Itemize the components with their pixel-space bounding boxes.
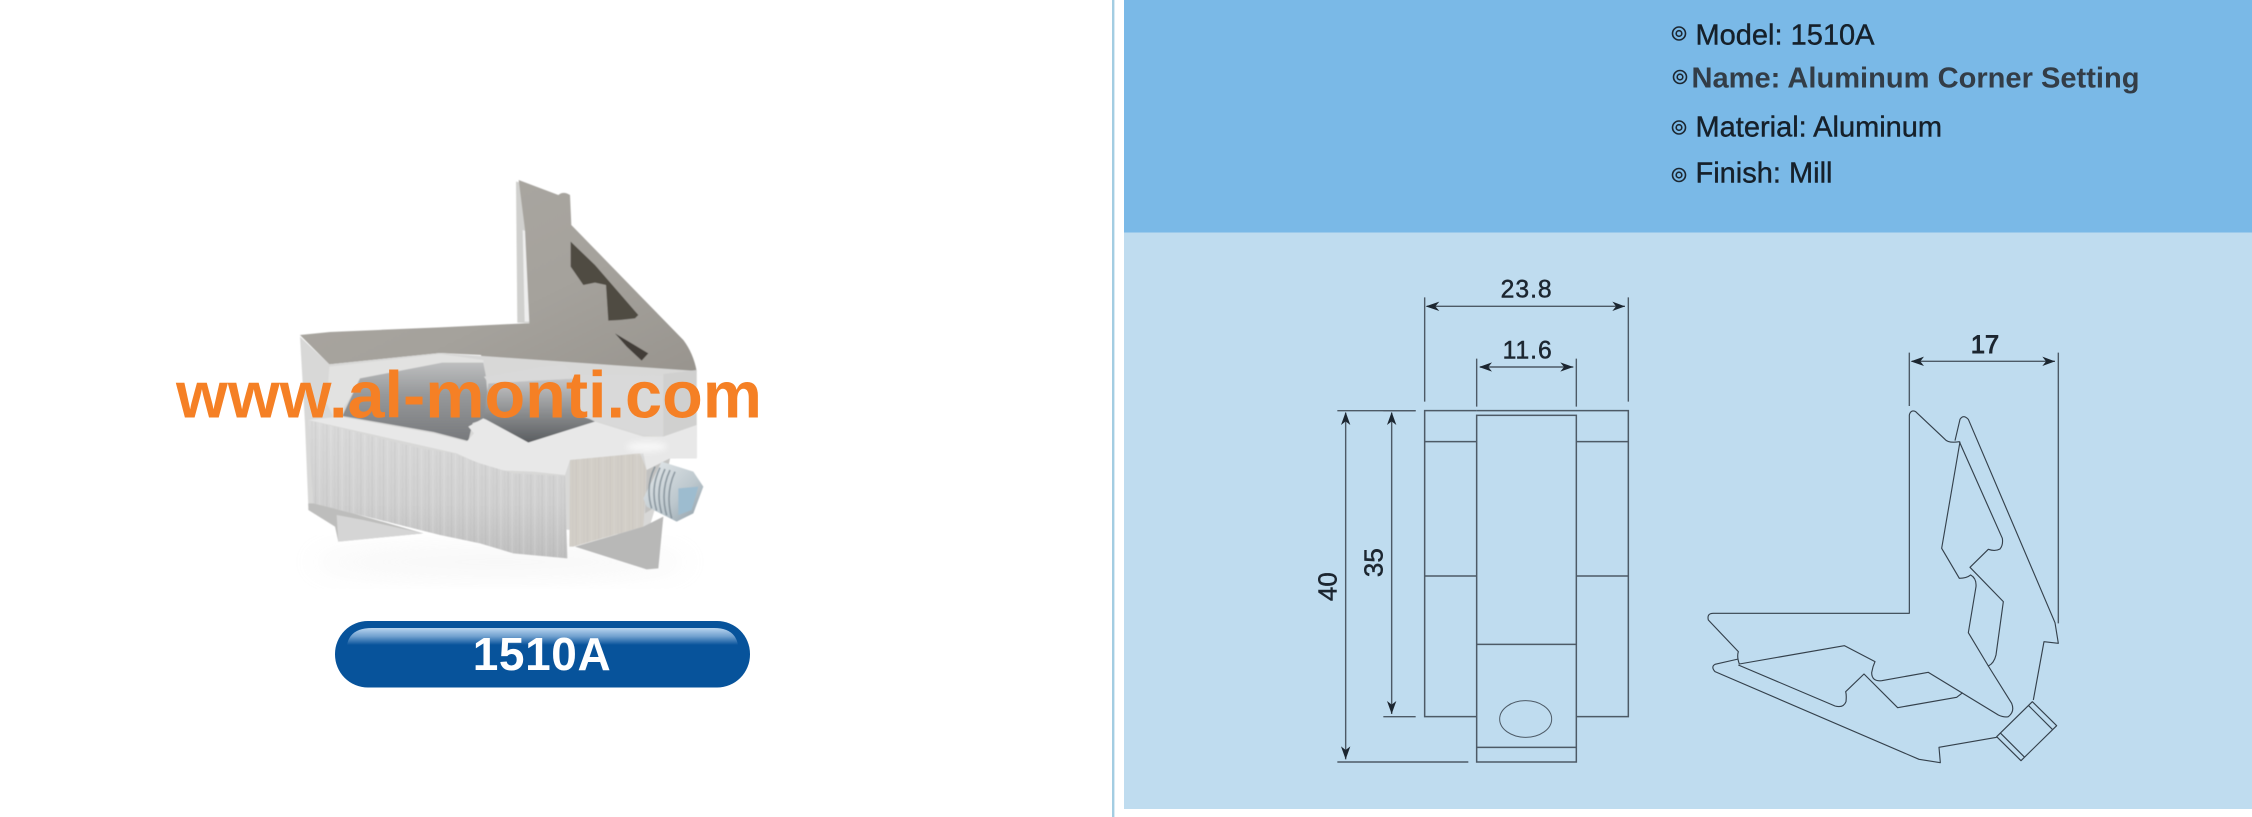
upper jaw wall [484,364,663,437]
dimension: height 40: 40 [1313,572,1343,601]
panel: specifications header [1124,0,2252,232]
model badge [335,621,750,688]
product photo: aluminum corner setting [300,180,703,574]
side of right block [645,458,670,513]
photo shadow [310,550,690,574]
set screw [1997,702,2057,761]
jaw floor [308,417,697,475]
dark slit in end face [615,333,648,361]
right hollow [484,378,595,443]
left hollow inner wall [327,354,486,420]
dimension: height 35 [1359,411,1416,717]
spec: name: Name: Aluminum Corner Setting [1692,63,2140,95]
left foot [308,503,423,542]
vertical divider stripe [1112,0,1114,817]
watermark: website url: www.al-monti.com [175,358,762,432]
spec: model: Model: 1510A [1696,19,1875,51]
right edge of body [663,370,697,458]
dimension: height 40 [1313,411,1468,762]
dimension: width 17: 17 [1971,331,1999,359]
dark channel in end face [571,242,638,321]
front view technical drawing [1313,276,1628,762]
dimension: width 11.6 [1477,337,1576,407]
badge gloss [347,628,738,645]
specification list [1672,19,2140,190]
sheen on front [627,441,667,452]
part outline [1425,411,1628,762]
machined end face [300,180,697,375]
spec: finish: Finish: Mill [1696,158,1832,190]
threaded bolt [643,462,703,522]
right foot [575,517,663,569]
dimension: height 35: 35 [1359,548,1389,577]
left hollow [342,363,490,441]
dimension: width 23.8: 23.8 [1501,276,1553,303]
dimension: width 17 [1909,331,2058,623]
badge label: 1510A [473,628,611,680]
front ribbed face [308,420,567,558]
spec: material: Material: Aluminum [1696,112,1942,144]
vertical leg side strip [516,182,531,323]
lower body base [300,337,697,537]
dimension: width 23.8 [1425,276,1628,402]
dimension: width 11.6: 11.6 [1503,337,1553,364]
panel: technical drawings [1124,232,2252,809]
side profile technical drawing [1708,331,2058,763]
front right block [569,453,647,547]
profile outline [1708,411,2058,763]
